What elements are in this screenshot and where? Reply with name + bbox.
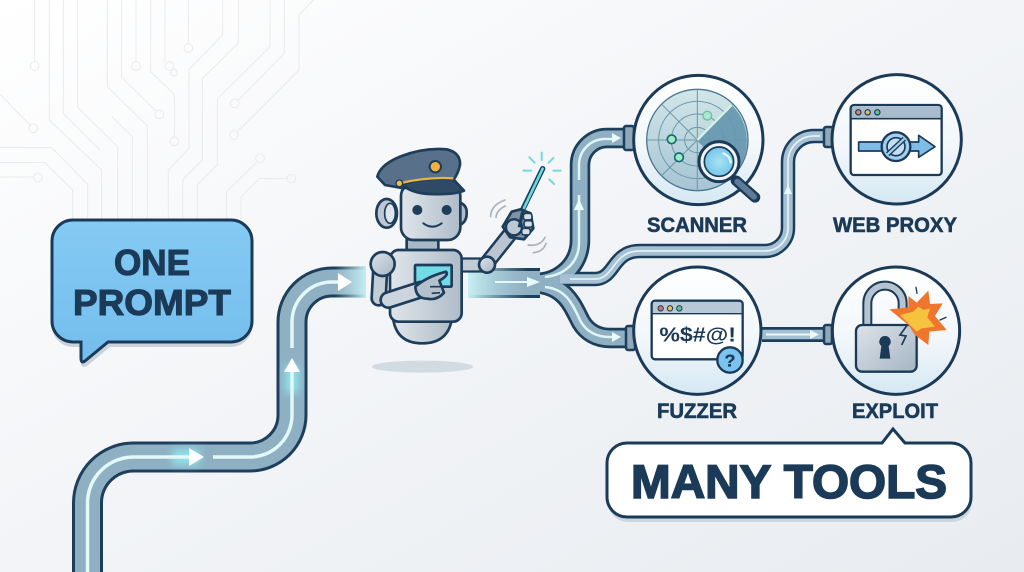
robot baton: [522, 153, 561, 212]
web proxy circle: [832, 75, 961, 204]
tool: exploit: [832, 267, 960, 394]
robot floor shadow: [372, 361, 473, 373]
robot conductor: [371, 149, 561, 373]
robot neck: [407, 239, 438, 252]
browser window: [851, 105, 942, 175]
robot raised arm: [462, 234, 510, 273]
motion lines: [491, 200, 546, 253]
conductor cap: [377, 149, 464, 194]
label: web proxy: WEB PROXY: [833, 214, 957, 237]
broken padlock: [856, 286, 917, 372]
callout: MANY TOOLS: [607, 429, 972, 522]
robot torso: [390, 250, 462, 322]
radar disc: [647, 89, 748, 191]
label: scanner: SCANNER: [647, 214, 747, 237]
speech bubble: ONE PROMPT: PROMPT: [73, 282, 231, 323]
question badge: ?: [724, 350, 735, 370]
speech bubble: ONE PROMPT: ONE: [114, 242, 190, 283]
label: exploit: EXPLOIT: [852, 400, 938, 423]
fuzzer window: %$#@!: [659, 324, 736, 347]
tool: fuzzer: [634, 267, 761, 394]
robot eyes: [412, 205, 452, 215]
robot base: [393, 320, 452, 343]
explosion burst: [889, 287, 947, 345]
circuit board pattern: [0, 0, 313, 220]
magnifying glass: [699, 142, 755, 197]
robot raised hand: [503, 209, 533, 239]
branching pipes: [468, 133, 826, 342]
robot smile: [423, 223, 442, 227]
fuzzer circle: [634, 267, 761, 394]
robot head: [401, 183, 460, 240]
tool: scanner: [634, 75, 763, 205]
input pipe: [88, 266, 366, 572]
exploit circle: [832, 267, 960, 394]
pipe connectors: [624, 126, 833, 350]
tool: web proxy: [832, 75, 961, 204]
robot ears: [376, 199, 467, 228]
chest screen: [415, 265, 452, 287]
label: fuzzer: FUZZER: [657, 400, 737, 423]
callout: MANY TOOLS: MANY TOOLS: [631, 455, 947, 508]
blocked arrow: [859, 132, 935, 161]
scanner circle: [634, 75, 763, 205]
speech bubble: ONE PROMPT: [52, 220, 252, 367]
robot pointing arm: [371, 252, 447, 300]
